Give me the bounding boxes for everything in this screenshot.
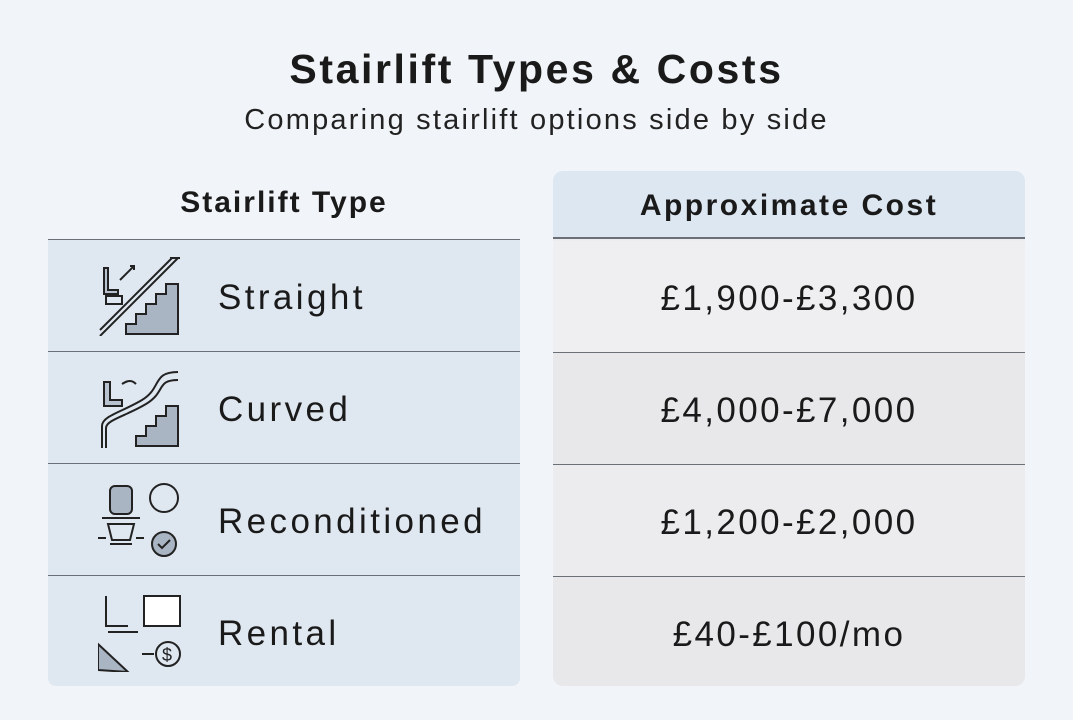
- cost: straight: £1,900-£3,300: [661, 279, 917, 318]
- title: Stairlift Types & Costs: [289, 46, 784, 92]
- row: reconditioned: [48, 464, 520, 576]
- cost: reconditioned: £1,200-£2,000: [661, 503, 917, 542]
- label: Reconditioned: [218, 502, 486, 541]
- heading: approximate cost: Approximate Cost: [640, 189, 938, 222]
- icon: curved stairlift: [101, 371, 179, 448]
- cost: straight: [553, 241, 1025, 353]
- label: Straight: [218, 278, 366, 317]
- heading: stairlift type: Stairlift Type: [180, 186, 388, 219]
- heading: approximate cost: [553, 171, 1025, 239]
- icon: reconditioned: [98, 483, 179, 557]
- subtitle: Comparing stairlift options side by side: [244, 104, 829, 136]
- cost: reconditioned: [553, 465, 1025, 577]
- row: curved: [48, 352, 520, 464]
- panel: stairlift types: [48, 239, 520, 686]
- icon: straight stairlift: [99, 257, 180, 336]
- icon: rental: $: [162, 645, 172, 665]
- row: rental: [98, 595, 340, 672]
- label: Curved: [218, 390, 351, 429]
- cost: curved: £4,000-£7,000: [661, 391, 917, 430]
- cost: rental: [553, 577, 1025, 689]
- panel: approximate cost: [553, 171, 1025, 686]
- label: Rental: [218, 614, 340, 653]
- row: straight: [48, 240, 520, 352]
- cost: curved: [553, 353, 1025, 465]
- icon: rental: [98, 595, 181, 672]
- cost: rental: £40-£100/mo: [673, 615, 905, 654]
